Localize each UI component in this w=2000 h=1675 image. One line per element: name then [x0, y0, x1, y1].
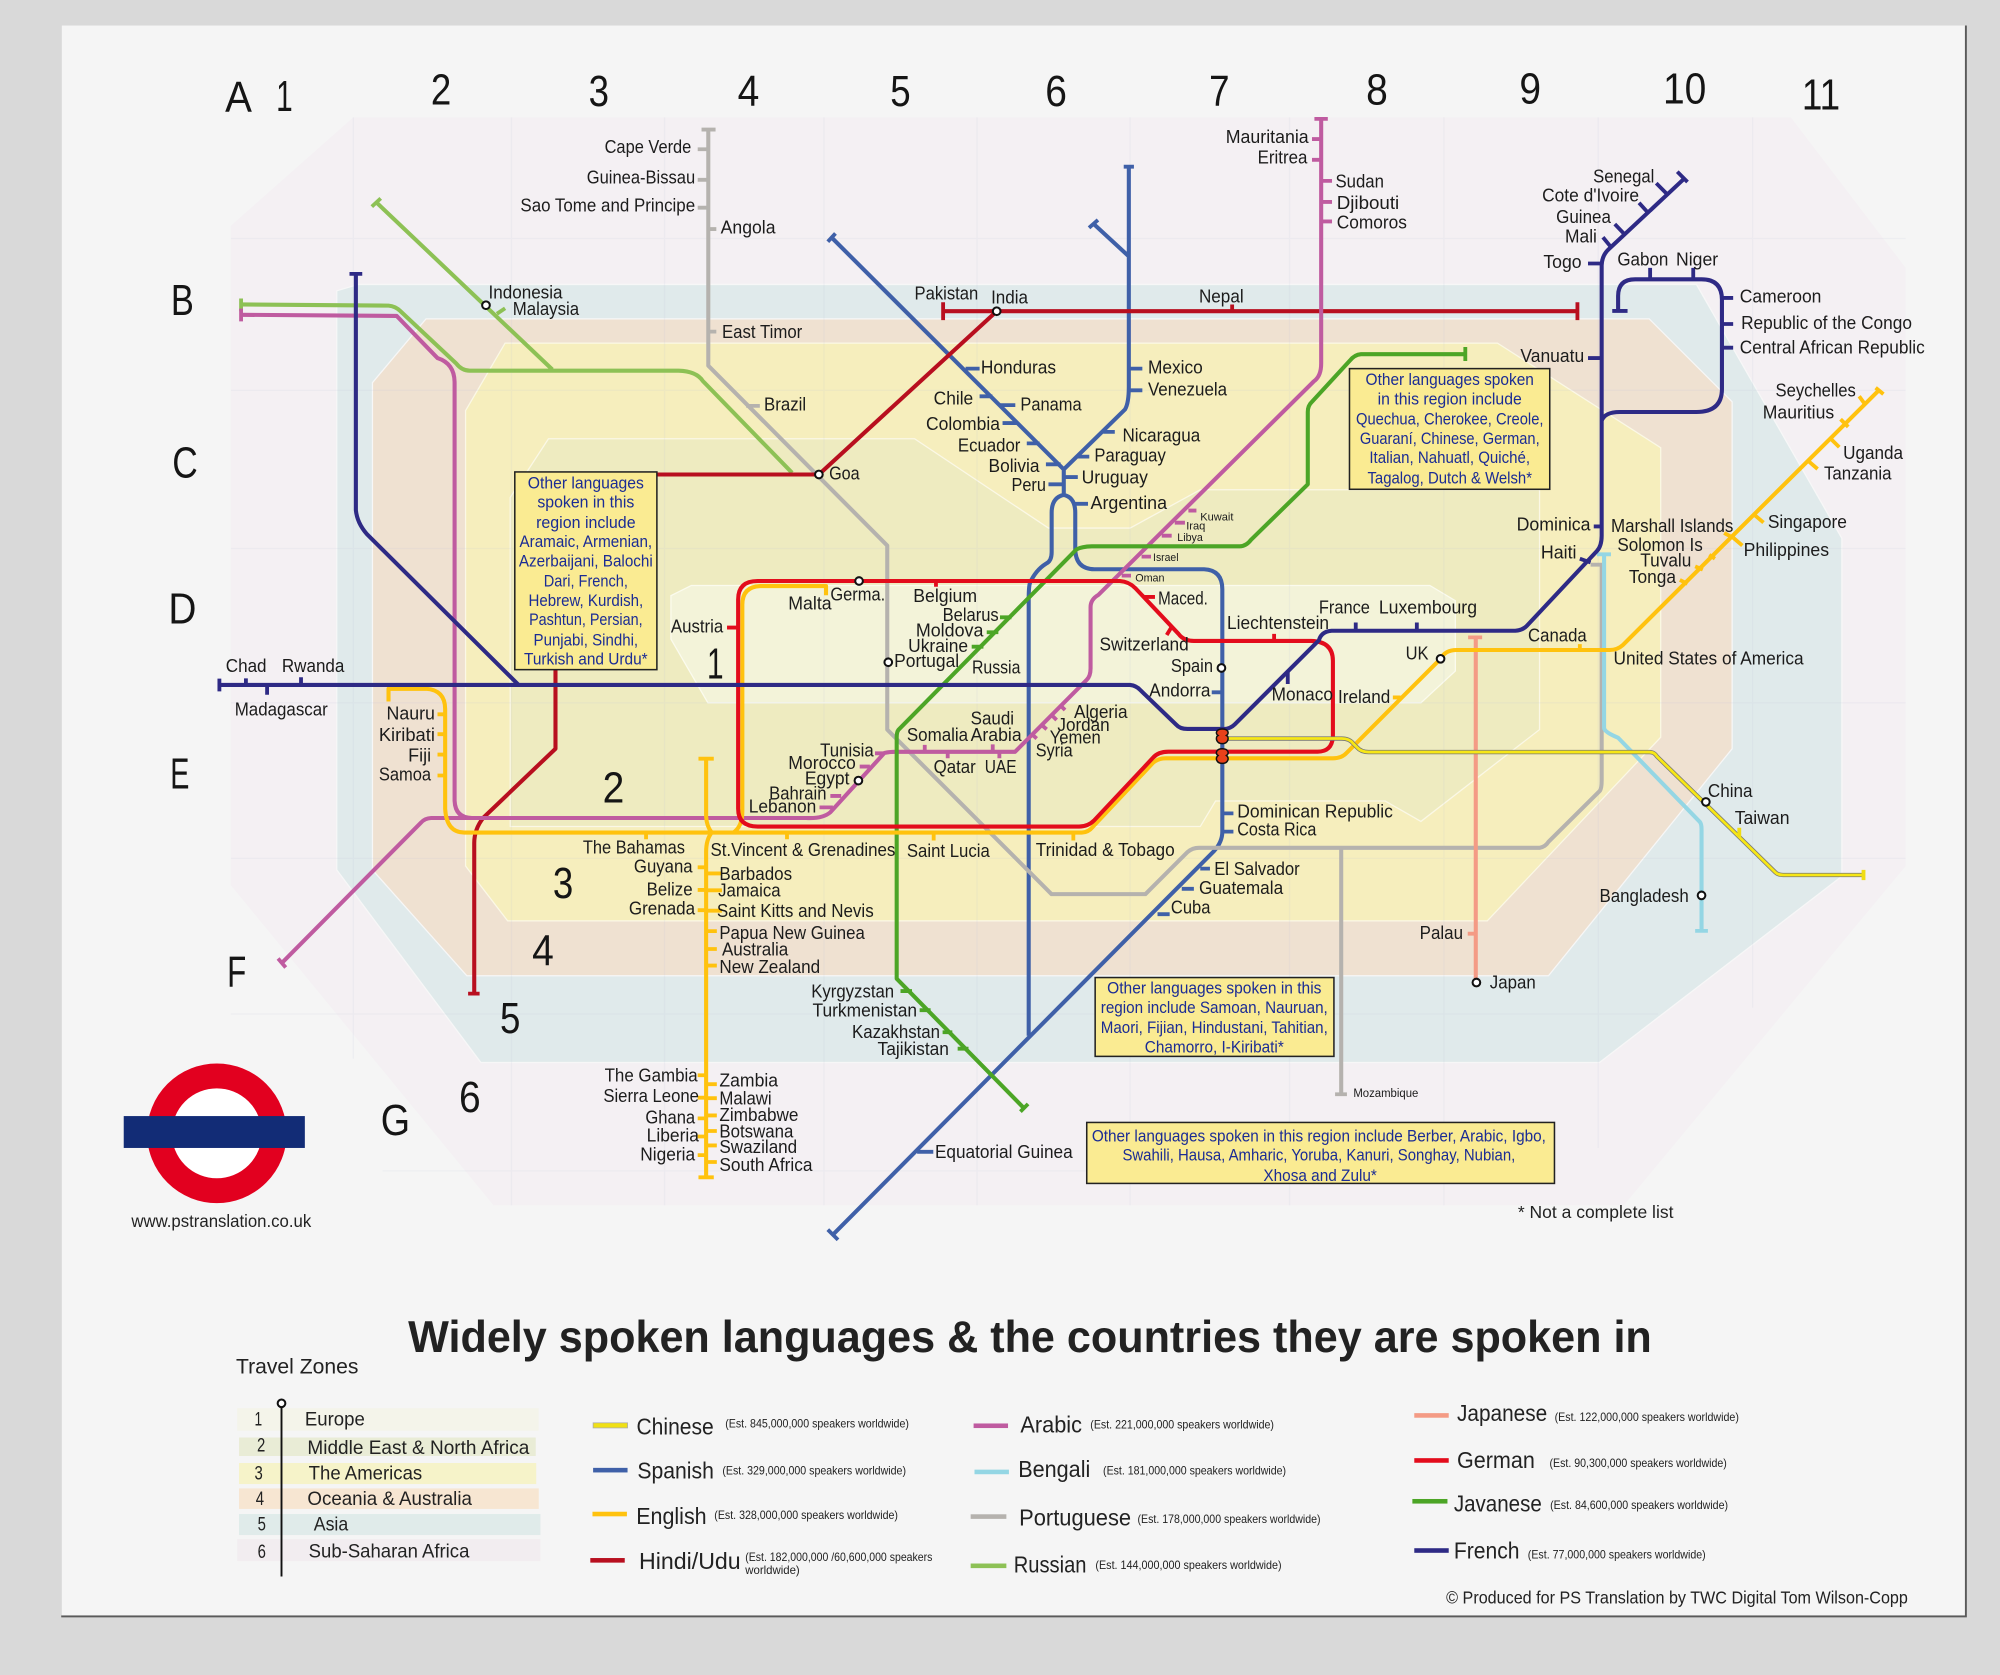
travel zones legend: The Americas	[309, 1464, 422, 1485]
legend entry: German: German	[1457, 1447, 1535, 1473]
labels: Hindi and Russian countries: Malaysia	[513, 298, 580, 319]
labels: English countries: Malawi	[719, 1088, 772, 1109]
labels: Spanish countries: Costa Rica	[1237, 818, 1317, 839]
labels: English countries: Saint Lucia	[907, 840, 990, 861]
line: Javanese	[897, 347, 1465, 1112]
labels: Portuguese countries: Goa	[829, 463, 860, 484]
labels: French countries: Guinea	[1556, 206, 1612, 227]
map zones background	[231, 117, 1906, 1205]
labels: Spanish countries: Peru	[1011, 474, 1046, 495]
labels: French countries: Niger	[1676, 248, 1718, 269]
grid reference letters and numbers: 1	[276, 73, 293, 121]
grid reference letters and numbers: G	[381, 1097, 410, 1145]
labels: Hindi and Russian countries: Indonesia	[489, 281, 563, 302]
labels: English countries: Ireland	[1338, 686, 1390, 707]
labels: English countries: Samoa	[379, 764, 432, 785]
labels: English countries: Guyana	[634, 855, 693, 876]
labels: English countries: Botswana	[719, 1121, 794, 1142]
labels: Arabic countries: Jordan	[1057, 714, 1110, 735]
line: French	[219, 172, 1733, 729]
legend entry: Javanese	[1412, 1490, 1728, 1516]
line: Hindi/Urdu	[468, 302, 1577, 994]
grid reference letters and numbers: 3	[589, 68, 609, 116]
labels: English countries: Philippines	[1744, 539, 1829, 560]
labels: Portuguese countries: Angola	[721, 216, 776, 237]
labels: Arabic countries: Kuwait	[1200, 511, 1234, 523]
callout: Sub-Saharan Africa languages: Other languages spoken in this region include Berber, Arabic, Igbo,	[1092, 1127, 1546, 1146]
legend entry: Javanese: Javanese	[1454, 1490, 1542, 1516]
callout: Middle East languages: Punjabi, Sindhi,	[534, 630, 638, 649]
labels: Javanese line countries: Kazakhstan	[852, 1021, 940, 1042]
labels: Spanish countries: Uruguay	[1082, 466, 1149, 487]
travel zones legend: Europe	[305, 1409, 365, 1430]
zone numbers on map: 3	[553, 860, 573, 908]
labels: Javanese line countries: Kyrgyzstan	[811, 980, 894, 1001]
labels: Spanish countries: Ecuador	[958, 435, 1020, 456]
website address: www.pstranslation.co.uk	[130, 1211, 312, 1231]
grid reference letters and numbers: 6	[1045, 68, 1067, 116]
zone numbers on map: 5	[500, 995, 520, 1043]
labels: Spanish countries: Panama	[1020, 394, 1082, 415]
labels: English countries: Barbados	[719, 863, 792, 884]
travel zones legend: 2	[257, 1436, 265, 1457]
travel zones legend	[237, 1399, 540, 1577]
legend entry: Arabic	[974, 1411, 1274, 1437]
labels: French countries: Monaco	[1272, 683, 1333, 704]
legend entry: Bengali: (Est. 181,000,000 speakers worldwide)	[1103, 1464, 1286, 1477]
labels: Arabic countries: UAE	[985, 756, 1017, 777]
grid reference letters and numbers: F	[227, 948, 246, 996]
labels: Arabic countries: Sudan	[1335, 171, 1384, 192]
legend entry: French	[1414, 1538, 1706, 1564]
labels: Spanish countries: Mexico	[1148, 357, 1203, 378]
labels: French countries: Mali	[1565, 225, 1597, 246]
grid reference letters and numbers: 5	[890, 68, 911, 116]
labels: Arabic countries: Syria	[1036, 739, 1073, 760]
legend entry: Portuguese: Portuguese	[1019, 1505, 1131, 1531]
labels: German countries: Switzerland	[1099, 634, 1189, 655]
callout: Middle East languages: Dari, French,	[544, 572, 628, 591]
labels: Spanish countries: Equatorial Guinea	[935, 1141, 1073, 1162]
labels: English countries: Zambia	[719, 1070, 779, 1091]
callout: Sub-Saharan Africa languages: Xhosa and Zulu*	[1263, 1166, 1377, 1185]
legend entry: Chinese	[593, 1413, 909, 1439]
callout: Americas languages: Other languages spoken	[1366, 370, 1534, 389]
labels: English countries: Jamaica	[718, 880, 781, 901]
legend entry: Javanese: (Est. 84,600,000 speakers worldwide)	[1550, 1499, 1728, 1512]
labels: Spanish countries: Colombia	[926, 413, 1001, 434]
callout: Middle East languages: Aramaic, Armenian,	[520, 532, 652, 551]
legend entry: Hindi/Urdu: (Est. 182,000,000 /60,600,000 speakers	[745, 1551, 933, 1564]
legend entry: English: English	[636, 1503, 707, 1529]
legend entry: German: (Est. 90,300,000 speakers worldwide)	[1549, 1457, 1727, 1470]
labels: English countries: Swaziland	[719, 1136, 797, 1157]
grid reference letters and numbers: B	[171, 277, 194, 325]
callout: Americas languages: Quechua, Cherokee, Creole,	[1356, 410, 1543, 429]
callout: Middle East languages: Turkish and Urdu*	[524, 650, 648, 669]
labels: Spanish countries	[926, 357, 1393, 1162]
travel zones legend: Oceania & Australia	[307, 1489, 472, 1510]
labels: Spanish countries: Spain	[1171, 655, 1213, 676]
callout: Middle East languages: Azerbaijani, Balochi	[519, 551, 653, 570]
labels: English countries: Singapore	[1768, 511, 1847, 532]
labels: Hindi and Russian countries	[489, 281, 1244, 677]
zone numbers on map: 4	[532, 928, 554, 976]
labels: English countries: Australia	[722, 938, 789, 959]
labels: English countries: New Zealand	[719, 956, 820, 977]
legend entry: Arabic: Arabic	[1020, 1411, 1082, 1437]
credit line: © Produced for PS Translation by TWC Digital Tom Wilson-Copp	[1446, 1587, 1908, 1607]
labels: Hindi and Russian countries: India	[991, 287, 1029, 308]
labels: Chinese, Bengali, Japanese countries: Taiwan	[1735, 807, 1790, 828]
labels: English countries: Solomon Is	[1617, 534, 1703, 555]
labels: Arabic countries: Djibouti	[1337, 192, 1399, 213]
line: Japanese	[1468, 637, 1482, 982]
labels: Portuguese countries: Portugal	[894, 650, 959, 671]
labels: English countries: Trinidad & Tobago	[1036, 839, 1175, 860]
zone 3: The Americas	[466, 343, 1661, 921]
callout: Oceania languages	[1095, 978, 1334, 1056]
callout: Middle East languages	[515, 472, 657, 670]
labels: English countries: UK	[1406, 642, 1429, 663]
labels: Spanish countries: Dominican Republic	[1237, 801, 1393, 822]
callout: Middle East languages: region include	[536, 513, 636, 532]
labels: French countries: France	[1319, 597, 1370, 618]
labels: English countries: Tanzania	[1824, 463, 1892, 484]
line: Russian	[241, 198, 792, 473]
callout: Middle East languages: Pashtun, Persian,	[529, 610, 643, 629]
labels: French countries: Dominica	[1517, 514, 1591, 535]
labels: French countries: Senegal	[1593, 165, 1654, 186]
labels: German countries: Maced.	[1158, 588, 1208, 609]
legend entry: Russian	[971, 1552, 1282, 1578]
legend entry: Spanish: (Est. 329,000,000 speakers worldwide)	[722, 1464, 906, 1477]
labels: Spanish countries: Argentina	[1091, 492, 1168, 513]
labels: Spanish countries: Bolivia	[989, 455, 1040, 476]
labels: Javanese line countries: Tajikistan	[878, 1038, 949, 1059]
legend entry: Hindi/Urdu	[590, 1548, 933, 1577]
footnote: not a complete list: * Not a complete list	[1518, 1202, 1674, 1222]
labels: English countries: Papua New Guinea	[719, 922, 865, 943]
labels: French countries: Gabon	[1617, 248, 1668, 269]
labels: Javanese line countries: Moldova	[916, 619, 984, 640]
callout: Americas languages: in this region include	[1378, 389, 1522, 408]
legend entry: Spanish	[593, 1457, 906, 1483]
labels: Spanish countries: Guatemala	[1199, 877, 1284, 898]
legend entry: English	[592, 1503, 898, 1529]
labels: English countries: Ghana	[645, 1107, 696, 1128]
line: Portuguese	[698, 130, 1602, 1094]
grid reference letters and numbers: E	[170, 750, 189, 798]
labels: English countries: Nauru	[386, 702, 435, 723]
labels: English countries: Grenada	[629, 898, 696, 919]
callout: Americas languages	[1349, 369, 1550, 489]
callout: Americas languages: Guaraní, Chinese, German,	[1360, 429, 1540, 448]
labels: Spanish countries: Cuba	[1171, 896, 1211, 917]
line: Spanish	[828, 167, 1233, 1240]
zone 5: Asia	[337, 284, 1842, 1062]
labels: Portuguese countries: Sao Tome and Principe	[520, 195, 695, 216]
labels: Portuguese countries: Mozambique	[1353, 1086, 1419, 1100]
callout: Middle East languages: spoken in this	[537, 493, 634, 512]
labels: French countries: Central African Republic	[1740, 336, 1925, 357]
labels: Arabic countries: Lebanon	[749, 796, 816, 817]
labels: English countries: Kiribati	[379, 724, 435, 745]
callout: Sub-Saharan Africa languages: Swahili, Hausa, Amharic, Yoruba, Kanuri, Songhay, Nubian,	[1122, 1146, 1515, 1165]
labels: Spanish countries: Andorra	[1149, 679, 1211, 700]
labels: Arabic countries: Tunisia	[820, 739, 874, 760]
legend entry: Russian: Russian	[1014, 1552, 1086, 1578]
callout: Oceania languages: Chamorro, I-Kiribati*	[1145, 1037, 1284, 1056]
labels: Spanish countries: Venezuela	[1148, 378, 1228, 399]
labels: Chinese, Bengali, Japanese countries: Palau	[1420, 922, 1463, 943]
labels: Arabic countries: Somalia	[907, 724, 969, 745]
legend entry: English: (Est. 328,000,000 speakers worldwide)	[714, 1509, 898, 1522]
labels: Arabic countries: Yemen	[1050, 727, 1101, 748]
stations	[482, 301, 1710, 986]
labels: Arabic countries: Libya	[1177, 532, 1203, 544]
labels: Arabic countries: Arabia	[971, 724, 1022, 745]
legend entry: Russian: (Est. 144,000,000 speakers worldwide)	[1095, 1559, 1282, 1572]
travel zones legend: 6	[258, 1542, 266, 1563]
grid reference letters and numbers: 8	[1366, 67, 1388, 115]
title: Widely spoken languages & the countries they are spoken in	[408, 1313, 1652, 1362]
labels: English countries: Uganda	[1843, 442, 1904, 463]
labels: Chinese, Bengali, Japanese countries: China	[1708, 780, 1753, 801]
labels: French countries: Luxembourg	[1379, 597, 1477, 618]
zone 2: Middle East and North Africa	[510, 439, 1540, 827]
labels: Arabic countries: Israel	[1153, 552, 1179, 564]
labels: Portuguese countries: Brazil	[764, 394, 806, 415]
labels: Arabic countries: Comoros	[1337, 211, 1407, 232]
labels: Javanese line countries	[811, 604, 999, 1059]
labels: English countries: Canada	[1528, 625, 1587, 646]
callout: Americas languages: Tagalog, Dutch & Welsh*	[1367, 468, 1533, 487]
grid reference letters and numbers: D	[168, 586, 196, 634]
legend entry: Chinese: (Est. 845,000,000 speakers worldwide)	[725, 1417, 909, 1430]
labels: French countries: Cote d'Ivoire	[1542, 185, 1639, 206]
labels: English countries: Tuvalu	[1640, 549, 1691, 570]
labels: Arabic countries: Bahrain	[769, 783, 827, 804]
labels: English countries: Liberia	[647, 1125, 700, 1146]
legend entry: Bengali	[974, 1456, 1286, 1482]
labels: German countries: Liechtenstein	[1227, 612, 1329, 633]
callout: Oceania languages: region include Samoan, Nauruan,	[1101, 998, 1328, 1017]
labels: English countries: South Africa	[719, 1154, 813, 1175]
interchange stations	[1216, 729, 1228, 763]
callout: Oceania languages: Other languages spoken in this	[1107, 979, 1321, 998]
zone 4: Oceania and Australia	[372, 319, 1732, 976]
grid reference letters and numbers: A	[225, 74, 252, 122]
labels: English countries: Marshall Islands	[1611, 515, 1733, 536]
zone numbers on map: 6	[459, 1074, 481, 1122]
legend entry: Bengali: Bengali	[1018, 1456, 1090, 1482]
labels: English countries: The Gambia	[605, 1065, 698, 1086]
grid reference letters and numbers: 7	[1209, 68, 1230, 116]
labels: Arabic countries: Egypt	[805, 767, 849, 788]
labels: French countries: Chad	[226, 655, 267, 676]
labels: Spanish countries: Chile	[934, 387, 973, 408]
labels: Portuguese countries: Guinea-Bissau	[587, 167, 695, 188]
labels: Spanish countries: Paraguay	[1094, 445, 1166, 466]
zone numbers on map: 1	[707, 641, 724, 689]
labels: German countries: Belgium	[913, 585, 977, 606]
callout: Middle East languages: Other languages	[528, 474, 644, 493]
labels: English countries: Nigeria	[640, 1144, 696, 1165]
grid reference letters and numbers: 10	[1663, 65, 1706, 113]
legend entry: Japanese	[1414, 1400, 1739, 1426]
travel zones legend: Asia	[314, 1515, 349, 1536]
labels: Chinese, Bengali, Japanese countries: Japan	[1490, 972, 1536, 993]
labels: Javanese line countries: Ukraine	[908, 635, 968, 656]
labels: English countries: Sierra Leone	[603, 1085, 699, 1106]
labels: French countries: Vanuatu	[1520, 345, 1584, 366]
labels: Chinese, Bengali, Japanese countries: Bangladesh	[1599, 885, 1689, 906]
grid reference letters and numbers: C	[172, 439, 198, 487]
labels: Arabic countries: Mauritania	[1226, 126, 1309, 147]
line: Bengali	[1597, 554, 1708, 931]
labels: English countries: Seychelles	[1776, 380, 1856, 401]
travel zones legend: 4	[256, 1489, 264, 1510]
labels: English countries: United States of America	[1614, 648, 1804, 669]
labels: English countries: Mauritius	[1763, 401, 1834, 422]
legend: languages	[590, 1400, 1739, 1578]
zone numbers on map: 2	[603, 764, 624, 812]
labels: English countries: Malta	[788, 593, 832, 614]
labels: English countries: St.Vincent & Grenadines	[710, 839, 895, 860]
labels: English countries: Belize	[647, 878, 693, 899]
labels: English countries: Fiji	[408, 744, 431, 765]
heading: Travel Zones: Travel Zones	[236, 1354, 359, 1379]
labels: French countries: Togo	[1543, 251, 1582, 272]
line: English	[389, 388, 1883, 1177]
labels: Spanish countries: Honduras	[981, 357, 1056, 378]
travel zones legend: 1	[254, 1409, 262, 1430]
labels: French countries: Republic of the Congo	[1741, 312, 1912, 333]
legend entry: Portuguese: (Est. 178,000,000 speakers worldwide)	[1137, 1513, 1321, 1526]
labels: Portuguese countries	[520, 136, 1419, 1100]
icon: underground roundel logo	[124, 1076, 305, 1191]
legend entry: German	[1414, 1447, 1727, 1473]
labels: Hindi and Russian countries: Nepal	[1199, 285, 1244, 306]
labels: German countries: Austria	[671, 616, 724, 637]
labels: French countries	[226, 165, 1925, 720]
labels: English countries: Saint Kitts and Nevis	[717, 900, 874, 921]
grid reference letters and numbers: 4	[738, 68, 759, 116]
labels: Arabic countries: Oman	[1135, 573, 1165, 585]
labels: Portuguese countries: Cape Verde	[605, 136, 691, 157]
zone numbers on map	[459, 641, 724, 1122]
grid reference letters and numbers: 11	[1802, 71, 1840, 119]
line: Arabic	[241, 119, 1332, 967]
labels: Javanese line countries: Turkmenistan	[812, 1000, 917, 1021]
labels: German countries: Germa.	[830, 584, 885, 605]
legend entry: Japanese: (Est. 122,000,000 speakers worldwide)	[1555, 1411, 1739, 1424]
labels: Hindi and Russian countries: Pakistan	[915, 283, 978, 304]
legend entry: Hindi/Urdu: Hindi/Udu	[639, 1548, 741, 1574]
callout: Sub-Saharan Africa languages	[1087, 1122, 1554, 1185]
labels: English countries: Zimbabwe	[719, 1104, 798, 1125]
labels: Hindi and Russian countries: Russia	[972, 656, 1021, 677]
labels: Arabic countries: Iraq	[1186, 520, 1205, 532]
labels: Arabic countries: Saudi	[971, 707, 1014, 728]
grid reference letters and numbers: 9	[1519, 65, 1541, 113]
zone 6: Sub-Saharan Africa	[231, 117, 1906, 1205]
legend entry: Arabic: (Est. 221,000,000 speakers worldwide)	[1090, 1419, 1274, 1432]
travel zones legend: 3	[254, 1464, 263, 1485]
legend entry: Chinese: Chinese	[636, 1413, 714, 1439]
line: Chinese	[1224, 739, 1864, 880]
labels: German countries	[671, 584, 1329, 655]
callout: Oceania languages: Maori, Fijian, Hindustani, Tahitian,	[1101, 1018, 1328, 1037]
grid reference letters and numbers: 2	[431, 67, 451, 115]
legend entry: Japanese: Japanese	[1457, 1400, 1547, 1426]
callout: Americas languages: Italian, Nahuatl, Quiché,	[1369, 448, 1530, 467]
legend entry: French: French	[1454, 1538, 1520, 1564]
labels: French countries: Cameroon	[1740, 285, 1821, 306]
labels: Spanish countries: Nicaragua	[1122, 424, 1201, 445]
labels: Arabic countries: Eritrea	[1258, 146, 1308, 167]
labels: English countries	[379, 380, 1904, 1175]
legend entry: Spanish: Spanish	[637, 1457, 714, 1483]
travel zones legend: Sub-Saharan Africa	[309, 1541, 470, 1562]
line: German	[727, 581, 1333, 827]
legend entry: Hindi/Urdu: worldwide)	[744, 1564, 800, 1577]
labels: Portuguese countries: East Timor	[722, 321, 802, 342]
labels: French countries: Haiti	[1541, 542, 1577, 563]
labels: Arabic countries: Qatar	[934, 756, 976, 777]
travel zones legend: 5	[258, 1515, 266, 1536]
legend entry: French: (Est. 77,000,000 speakers worldwide)	[1528, 1549, 1706, 1562]
labels: Javanese line countries: Belarus	[943, 604, 999, 625]
labels: English countries: The Bahamas	[583, 836, 685, 857]
zone 1: Europe	[671, 585, 1455, 703]
labels: English countries: Tonga	[1629, 566, 1677, 587]
labels: Spanish countries: El Salvador	[1214, 858, 1300, 879]
labels: French countries: Madagascar	[235, 699, 328, 720]
labels: Arabic countries	[749, 126, 1407, 816]
travel zones legend: Middle East & North Africa	[307, 1438, 530, 1459]
labels: Arabic countries: Morocco	[788, 752, 856, 773]
grid reference letters and numbers	[168, 65, 1840, 1145]
labels: Arabic countries: Algeria	[1074, 701, 1128, 722]
callout: Middle East languages: Hebrew, Kurdish,	[528, 591, 643, 610]
labels: Chinese, Bengali, Japanese countries	[1420, 780, 1790, 993]
labels: French countries: Rwanda	[282, 655, 345, 676]
legend entry: Portuguese	[971, 1505, 1321, 1531]
